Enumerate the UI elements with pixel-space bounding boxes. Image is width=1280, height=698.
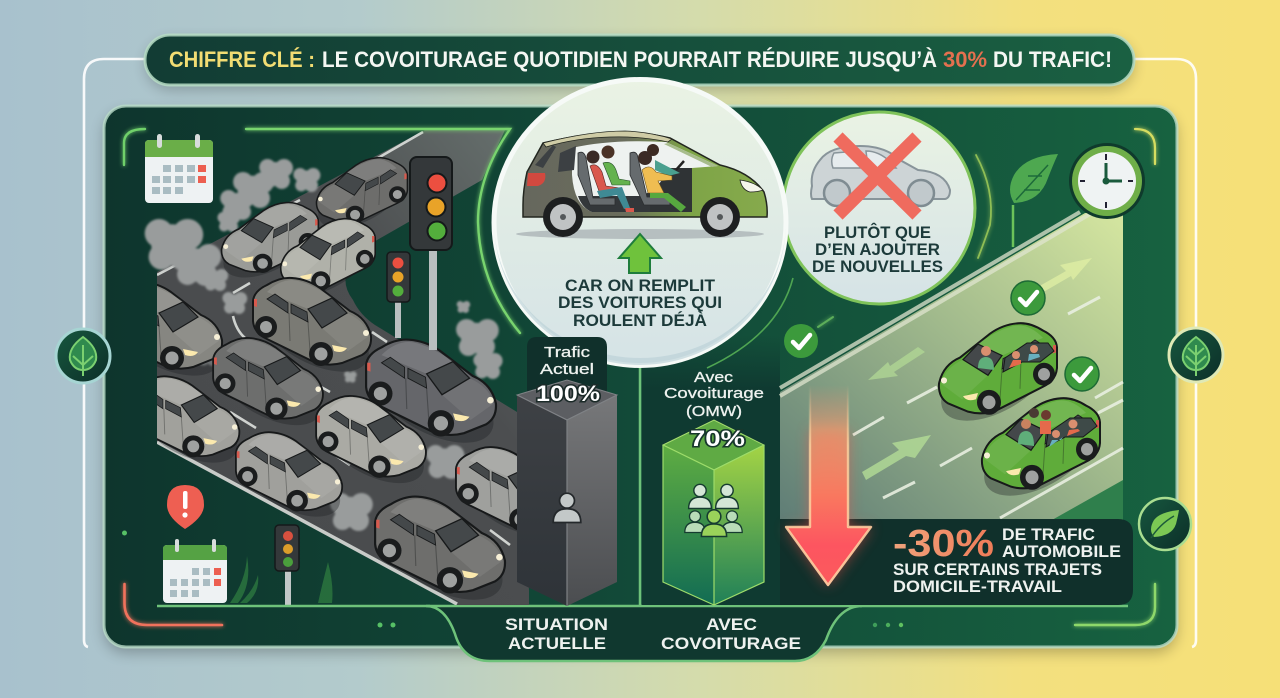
- bar: carpool traffic 70%: [663, 370, 764, 605]
- label: Trafic Actuel: Actuel: [540, 361, 594, 378]
- label: avec covoiturage: AVEC: [706, 615, 757, 634]
- passengers: [586, 144, 686, 212]
- wheels: [543, 197, 583, 237]
- grey cars in traffic: [157, 156, 517, 600]
- neon accent lines: [122, 129, 1155, 628]
- road: free-flowing: [780, 213, 1123, 520]
- green car with passengers: [929, 323, 1063, 437]
- label: situation actuelle: ACTUELLE: [508, 634, 606, 653]
- callout text: AUTOMOBILE: [1002, 543, 1121, 561]
- grass decoration: [230, 556, 332, 603]
- callout text: DOMICILE-TRAVAIL: [893, 578, 1062, 596]
- panel: no extra cars circle: [783, 112, 975, 304]
- callout text: DE TRAFIC: [1002, 526, 1095, 544]
- lower verge: [1052, 480, 1123, 520]
- right section backdrop: [642, 335, 780, 605]
- icon: left leaf medal: [56, 329, 110, 383]
- text: car on remplit: [558, 277, 722, 330]
- icon: lower traffic light: [275, 525, 299, 605]
- check badge: middle: [1065, 357, 1099, 391]
- main panel: [104, 106, 1177, 653]
- bar: current traffic 100%: [517, 337, 617, 606]
- label: Avec Covoiturage (OMW): (OMW): [686, 404, 742, 420]
- red down arrow: [785, 385, 872, 586]
- callout text: SUR CERTAINS TRAJETS: [893, 561, 1102, 579]
- label: situation actuelle: SITUATION: [505, 615, 608, 634]
- icon: bottom calendar: [163, 539, 227, 603]
- label: Avec Covoiturage (OMW): Avec: [694, 370, 733, 386]
- icon: group of people: [685, 484, 742, 536]
- text: plutôt que: D’EN AJOUTER: [815, 241, 940, 259]
- big number: -30%: [893, 523, 994, 565]
- icon: crossed-out grey car: [811, 137, 950, 215]
- label: Trafic Actuel: Trafic: [544, 344, 591, 361]
- title: du trafic: DU TRAFIC!: [993, 47, 1112, 72]
- icon: one person: [553, 493, 581, 522]
- value: 70%: 70%: [690, 426, 745, 451]
- icon: up arrow: [619, 234, 661, 273]
- icon: small traffic light: [387, 252, 410, 338]
- icon: big traffic light: [410, 157, 452, 350]
- lane dashes: [853, 297, 1123, 518]
- text: plutôt que: DE NOUVELLES: [812, 258, 943, 276]
- label: avec covoiturage: [661, 615, 801, 653]
- callout text: [893, 526, 1121, 596]
- icon: top calendar: [145, 134, 213, 203]
- green car full of passengers: [972, 398, 1106, 512]
- title banner: [145, 35, 1134, 90]
- label: Trafic Actuel: [540, 344, 594, 378]
- title: 30%: 30%: [943, 47, 987, 72]
- road markings: [157, 132, 510, 604]
- check badge: upper left: [784, 324, 818, 358]
- text: car on remplit: ROULENT DÉJÀ: [573, 311, 707, 330]
- icon: lower right leaf medal: [1139, 498, 1191, 550]
- bottom label tab: [426, 606, 862, 661]
- road arrows: [862, 258, 1092, 480]
- text: plutôt que: PLUTÔT QUE: [824, 223, 931, 242]
- text: car on remplit: CAR ON REMPLIT: [565, 277, 715, 295]
- interior: [578, 152, 692, 212]
- guard rail: [780, 212, 1090, 396]
- panel: carpool road scene: [780, 212, 1123, 520]
- icon: side-view car with passengers: [516, 131, 767, 239]
- check badges: [1011, 281, 1045, 315]
- title: chiffre clé: CHIFFRE CLÉ :: [169, 47, 315, 72]
- text: car on remplit: DES VOITURES QUI: [558, 294, 722, 312]
- icon: leaf sprout: [1010, 154, 1058, 247]
- label: avec covoiturage: COVOITURAGE: [661, 634, 801, 653]
- label: Avec Covoiturage (OMW): Covoiturage: [664, 386, 764, 402]
- icon: alert pin: [167, 485, 204, 529]
- divider line: [157, 367, 1128, 606]
- road: congested: [157, 130, 530, 605]
- icon: right leaf medal: [1169, 328, 1223, 382]
- smoke clouds: [145, 159, 503, 531]
- panel: current traffic scene: [143, 130, 529, 605]
- callout: -30%: [780, 519, 1133, 605]
- label: situation actuelle: [505, 615, 608, 653]
- outer white frame: [84, 59, 1196, 647]
- panel: full car circle: [494, 80, 786, 366]
- label: Avec Covoiturage (OMW): [664, 370, 764, 420]
- text: plutôt que: [812, 223, 943, 276]
- value: 100%: 100%: [536, 381, 600, 406]
- icon: clock: [1069, 143, 1145, 219]
- title: main sentence: LE COVOITURAGE QUOTIDIEN POURRAIT RÉDUIRE JUSQU’À: [322, 47, 937, 72]
